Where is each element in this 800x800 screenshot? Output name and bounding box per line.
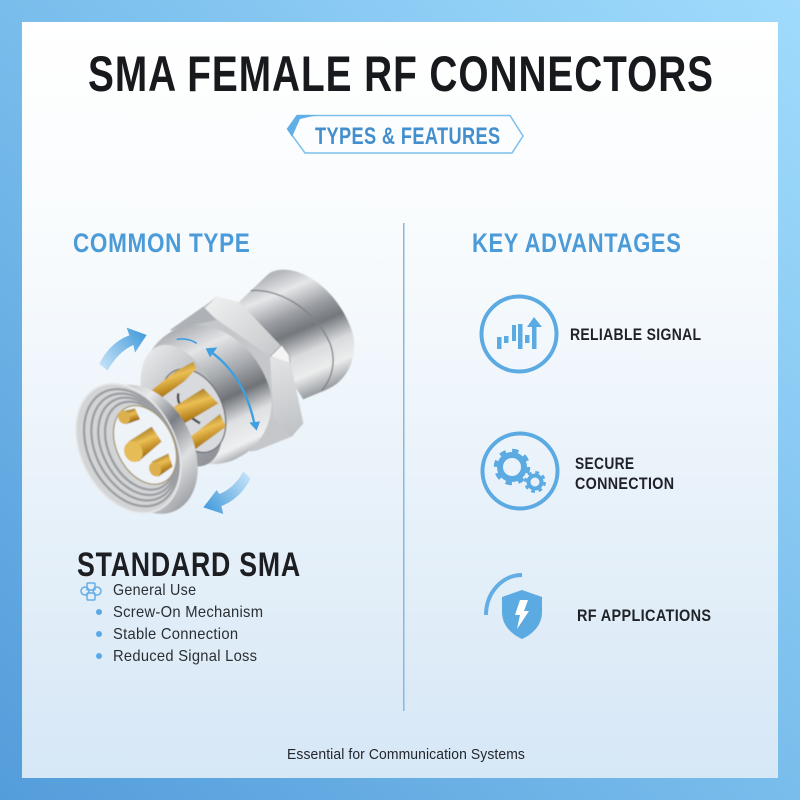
feature list: Screw-On Mechanism xyxy=(113,604,263,621)
feature list: Reduced Signal Loss xyxy=(113,648,257,665)
subtitle badge: TYPES & FEATURES xyxy=(315,123,500,150)
double-headed arc arrow xyxy=(177,339,260,431)
footer note: Essential for Communication Systems xyxy=(287,747,525,763)
icon: reliable signal xyxy=(482,296,556,372)
heading: standard SMA: STANDARD SMA xyxy=(77,546,301,584)
center divider xyxy=(403,223,404,711)
mid barrel xyxy=(143,325,271,464)
feature list xyxy=(81,582,263,665)
front coupling ring xyxy=(55,366,219,532)
label: secure connection: CONNECTION xyxy=(575,474,674,493)
connector illustration xyxy=(55,270,354,532)
heading: key advantages: KEY ADVANTAGES xyxy=(472,228,682,258)
gold pins behind front ring xyxy=(150,362,226,451)
icon: secure connection gears xyxy=(482,434,558,508)
subtitle badge xyxy=(287,115,523,153)
back barrel xyxy=(238,270,354,399)
label: secure connection xyxy=(575,454,674,493)
heading: common type: COMMON TYPE xyxy=(73,228,250,258)
icon: RF shield xyxy=(486,575,542,639)
rotation arrow: upper left xyxy=(99,328,147,371)
mid barrel bore xyxy=(148,358,239,463)
bore inner ring xyxy=(178,393,200,423)
label: secure connection: SECURE xyxy=(575,454,634,473)
label: RF applications: RF APPLICATIONS xyxy=(577,606,711,625)
hex nut xyxy=(170,297,303,452)
pins inside ring xyxy=(116,408,173,478)
feature list: General Use xyxy=(113,582,196,599)
mid barrel face xyxy=(124,333,239,478)
label: reliable signal: RELIABLE SIGNAL xyxy=(570,325,701,344)
feature list: Stable Connection xyxy=(113,626,238,643)
icon: general use xyxy=(81,583,101,600)
rotation arrow: lower right xyxy=(203,472,251,514)
